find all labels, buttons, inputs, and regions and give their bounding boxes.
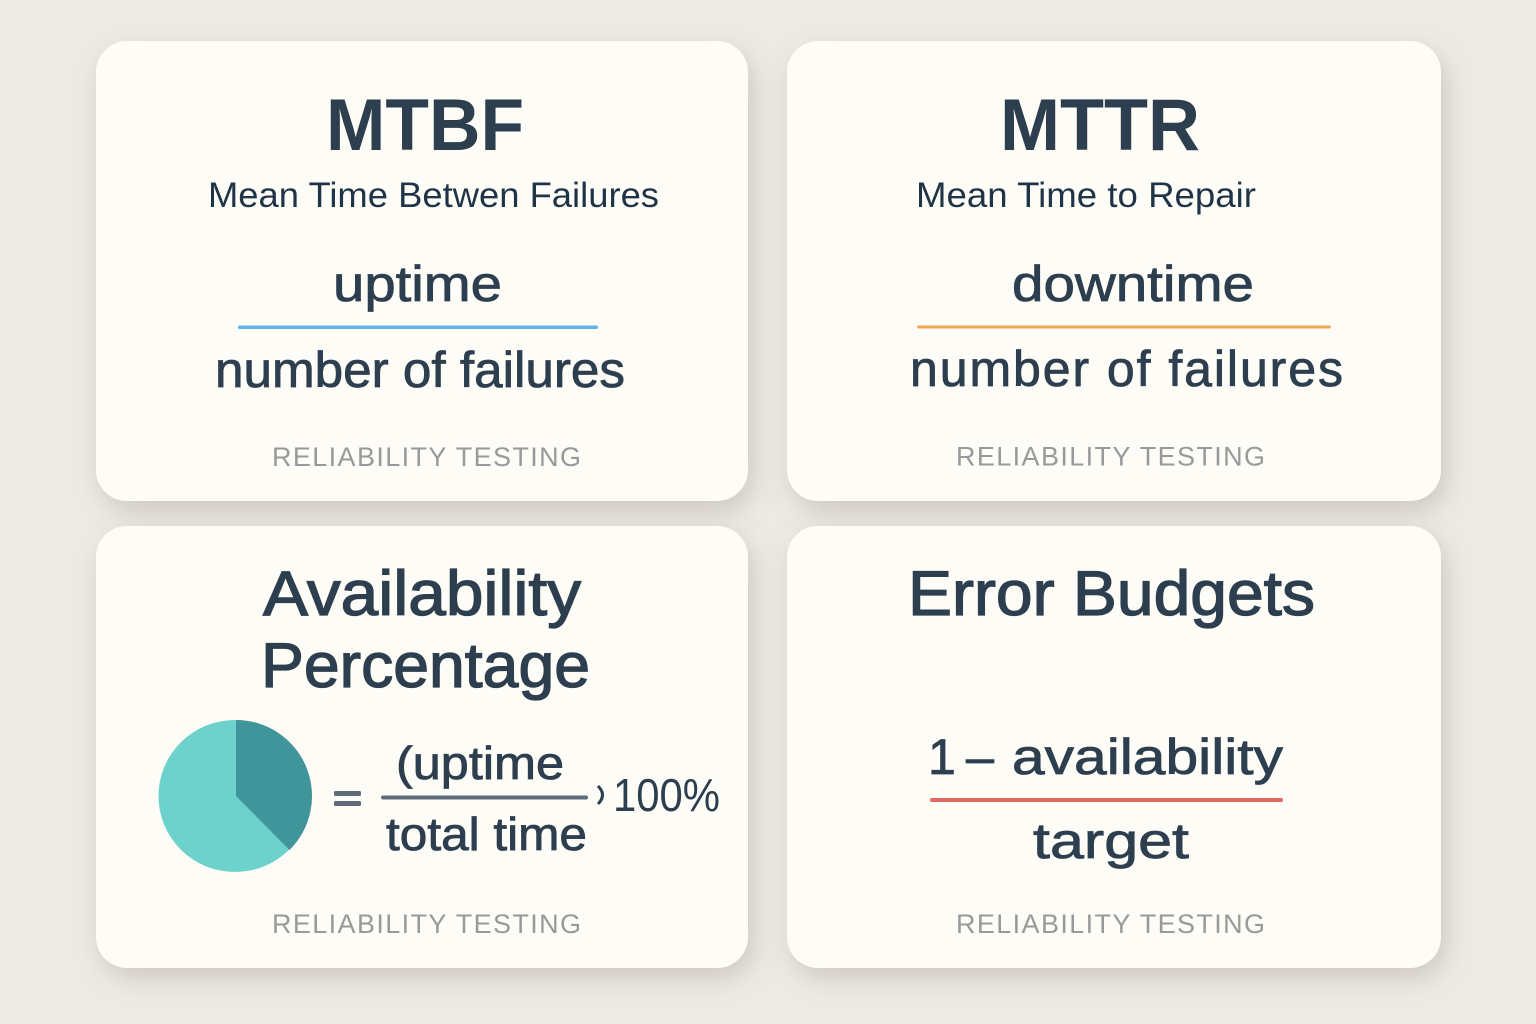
footer label: RELIABILITY TESTING	[956, 909, 1265, 939]
fraction line: red	[930, 798, 1283, 802]
pie chart	[158, 720, 312, 872]
formula numerator: uptime: uptime	[333, 256, 502, 312]
subtitle: MTTR: Mean Time to Repair	[916, 176, 1256, 215]
footer label: RELIABILITY TESTING	[272, 442, 581, 472]
subtitle: MTBF: Mean Time Betwen Failures	[208, 176, 659, 215]
heading: MTBF: MTBF	[326, 85, 524, 166]
heading: MTTR: MTTR	[1000, 85, 1200, 166]
formula numerator: 1 – availability	[928, 729, 1283, 785]
footer label: RELIABILITY TESTING	[272, 909, 581, 939]
formula denominator: total time: total time	[386, 808, 587, 860]
fraction line: blue	[238, 326, 598, 329]
formula numerator: 1 – availability: availability	[1012, 729, 1283, 785]
heading: Availability Percentage	[261, 559, 590, 701]
formula denominator: number of failures: number of failures	[215, 342, 625, 398]
closing parenthesis	[598, 786, 602, 804]
heading: Error Budgets: Error Budgets	[908, 559, 1315, 629]
fraction line: orange	[917, 326, 1331, 328]
heading: Availability Percentage: Availability	[263, 559, 582, 629]
heading: Availability Percentage: Percentage	[261, 631, 590, 701]
formula numerator: downtime: downtime	[1012, 256, 1254, 312]
formula numerator: (uptime: (uptime	[396, 737, 564, 789]
panel: Error Budgets	[787, 526, 1441, 968]
multiplier: 100%: 100%	[613, 769, 720, 821]
formula denominator: number of failures: number of failures	[910, 341, 1343, 397]
formula denominator: target: target	[1033, 813, 1189, 869]
formula numerator: 1 – availability: –	[966, 729, 994, 785]
panel: MTTR	[787, 41, 1441, 501]
panel: MTBF	[96, 41, 748, 501]
panel: Availability Percentage	[96, 526, 748, 968]
footer label: RELIABILITY TESTING	[956, 442, 1265, 472]
fraction line: grey	[381, 796, 588, 800]
equals sign	[334, 791, 361, 806]
formula numerator: 1 – availability: 1	[928, 729, 956, 785]
